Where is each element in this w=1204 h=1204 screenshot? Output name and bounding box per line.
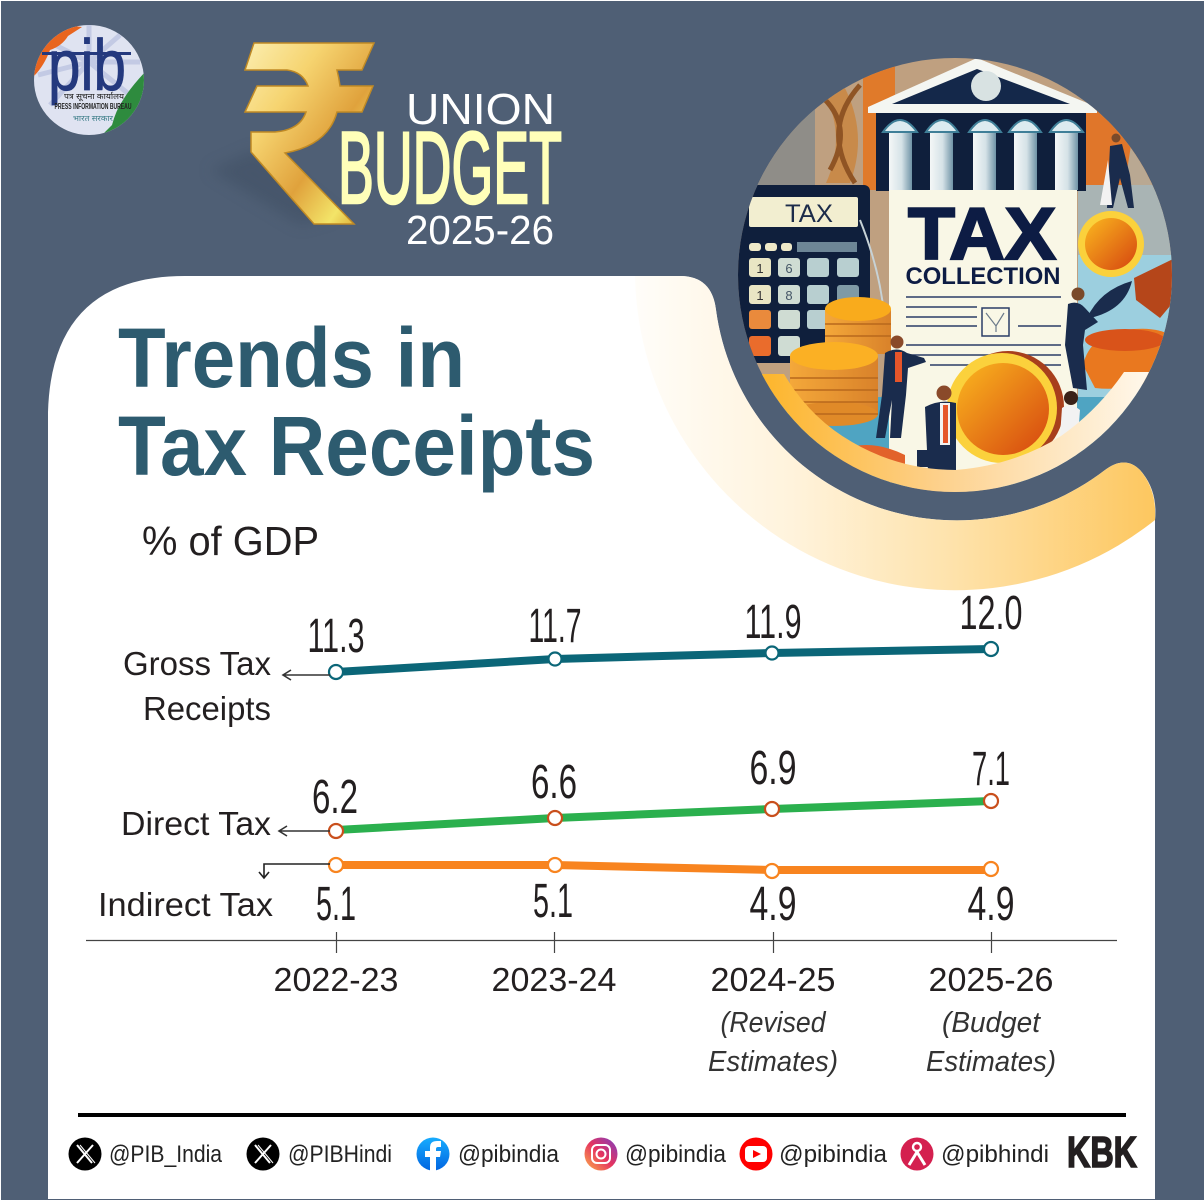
arrow: indirect tax <box>259 864 330 878</box>
series: gross tax receipts <box>308 587 1022 679</box>
handle: X PIBHindi <box>246 1138 392 1170</box>
calculator: TAX <box>785 200 833 228</box>
label: gross tax receipts <box>123 645 271 727</box>
business people <box>876 134 1134 472</box>
handle: YouTube: @pibindia <box>779 1141 888 1168</box>
series: gross tax receipts: 11.9 <box>744 596 802 649</box>
title <box>118 311 595 493</box>
series: direct tax: 6.6 <box>531 756 577 809</box>
handle: X PIB_India <box>68 1138 223 1170</box>
small dish at floor <box>842 445 905 470</box>
building pediment <box>868 58 1097 191</box>
handle: Koo-style app <box>900 1138 1049 1170</box>
axis <box>86 932 1117 953</box>
title: Trends in <box>118 311 465 405</box>
KBK mark: KBK <box>1067 1128 1137 1177</box>
series: direct tax: 6.2 <box>312 771 358 824</box>
small coin <box>1078 211 1144 277</box>
label: gross tax receipts: Receipts <box>143 690 271 727</box>
PIB logo: भारत सरकार <box>73 114 114 123</box>
PIB logo: pib <box>48 26 126 106</box>
series: indirect tax: 4.9 <box>750 878 796 931</box>
handle: YouTube <box>740 1138 888 1170</box>
axis labels: Estimates) <box>708 1046 838 1078</box>
heading: Union Budget 2025-26 <box>338 85 562 253</box>
series: direct tax: 6.9 <box>750 742 796 795</box>
heading: Union Budget 2025-26: BUDGET <box>338 111 562 225</box>
series: gross tax receipts: 11.3 <box>308 610 364 663</box>
axis labels: 2023-24 <box>492 961 616 998</box>
social media row <box>68 1138 1049 1170</box>
axis labels <box>274 961 1056 1078</box>
handle: X PIBHindi: @PIBHindi <box>288 1141 392 1168</box>
tax document: TAX <box>908 194 1056 275</box>
axis labels: 2022-23 <box>274 961 398 998</box>
golden crescent <box>762 372 1149 492</box>
arrow: direct tax <box>279 826 330 836</box>
white content card <box>48 276 1155 1199</box>
calculator <box>730 185 884 363</box>
axis labels: Estimates) <box>926 1046 1056 1078</box>
title: Tax Receipts <box>118 399 595 493</box>
golden swoosh <box>635 276 1155 590</box>
series: indirect tax <box>316 858 1014 931</box>
series: indirect tax: 5.1 <box>316 878 356 931</box>
PIB logo: PRESS INFORMATION BUREAU <box>54 102 132 111</box>
handle: X PIB_India: @PIB_India <box>109 1141 223 1168</box>
gavel and coin dish <box>1083 258 1175 389</box>
large coin <box>947 351 1064 463</box>
tax document: COLLECTION <box>906 263 1060 290</box>
PIB logo <box>34 25 144 135</box>
arrow: gross tax receipts <box>283 670 330 680</box>
axis labels: (Revised <box>720 1007 826 1039</box>
handle: Instagram <box>584 1138 727 1170</box>
PIB logo: पत्र सूचना कार्यालय <box>64 91 124 102</box>
calculator: 8 <box>785 288 793 303</box>
heading: Union Budget 2025-26: 2025-26 <box>406 207 554 253</box>
footer divider <box>78 1113 1126 1117</box>
series: indirect tax: 5.1 <box>533 875 573 928</box>
label: direct tax: Direct Tax <box>121 805 272 842</box>
coin stacks <box>790 297 891 426</box>
handle: Koo-style app: @pibhindi <box>941 1141 1049 1168</box>
axis labels: 2025-26 <box>928 961 1054 998</box>
calculator: 1 <box>756 261 764 276</box>
handle: Instagram: @pibindia <box>625 1141 727 1168</box>
series: direct tax <box>312 742 1010 838</box>
heading: Union Budget 2025-26: UNION <box>406 85 555 134</box>
series: indirect tax: 4.9 <box>968 878 1014 931</box>
illustration: tax collection <box>730 55 1180 500</box>
building columns <box>883 120 1083 190</box>
unit label: % of GDP <box>142 518 319 564</box>
handle: Facebook: @pibindia <box>458 1141 560 1168</box>
series: gross tax receipts: 11.7 <box>528 600 582 653</box>
series: gross tax receipts: 12.0 <box>960 587 1022 640</box>
line chart <box>86 587 1117 1078</box>
calculator: 1 <box>756 288 764 303</box>
rupee symbol with shadow <box>210 43 374 225</box>
label: gross tax receipts: Gross Tax <box>123 645 271 682</box>
handle: Facebook <box>416 1138 560 1170</box>
tax document <box>889 190 1077 475</box>
label: indirect tax: Indirect Tax <box>98 886 274 923</box>
axis labels: (Budget <box>942 1007 1042 1039</box>
series: direct tax: 7.1 <box>972 743 1010 796</box>
calculator: 6 <box>785 261 793 276</box>
axis labels: 2024-25 <box>710 961 836 998</box>
